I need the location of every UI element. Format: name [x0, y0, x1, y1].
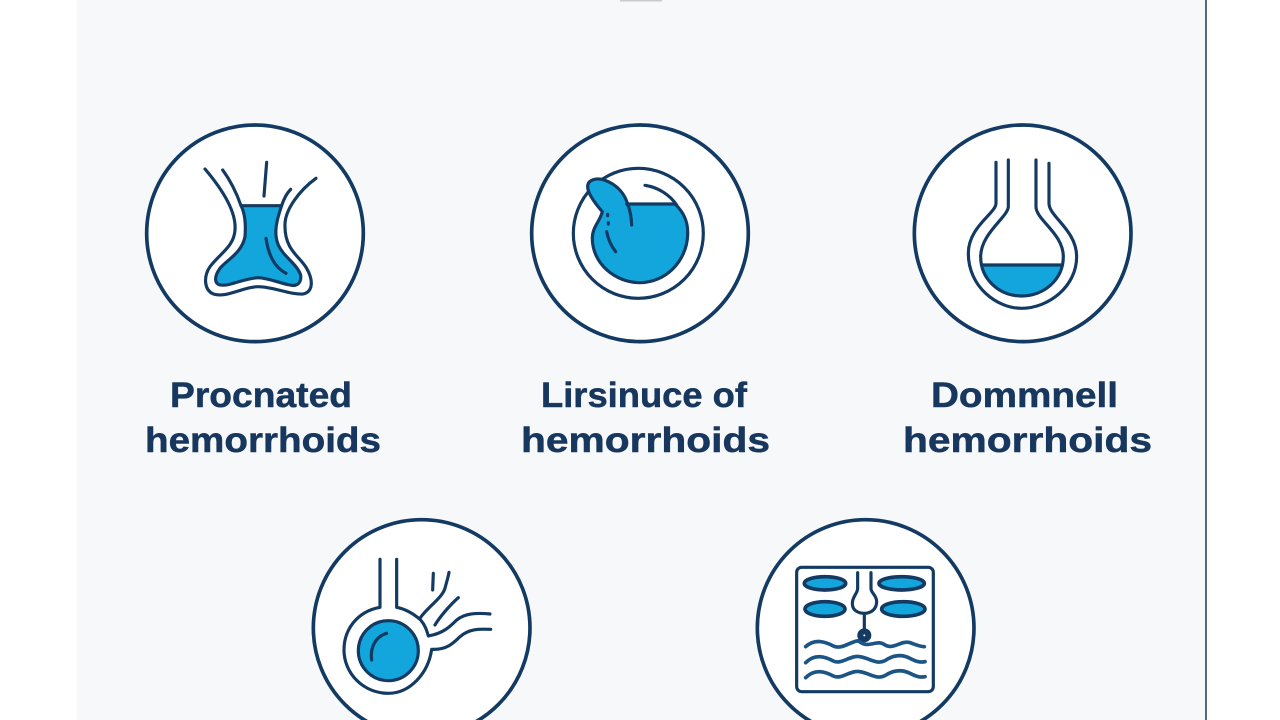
- icon: tissue cross-section: [757, 520, 974, 720]
- label: Dommnell hemorrhoids: hemorrhoids: [903, 421, 1152, 460]
- label: Procnated hemorrhoids: [145, 376, 381, 460]
- icon: round hemorrhoid in ring: [532, 125, 748, 342]
- icon: round hemorrhoid with branching vessels: [313, 520, 530, 720]
- label: Dommnell hemorrhoids: Dommnell: [931, 376, 1118, 415]
- label: Procnated hemorrhoids: hemorrhoids: [145, 421, 381, 460]
- label: Lirsinuce of hemorrhoids: [521, 376, 770, 460]
- label: Procnated hemorrhoids: Procnated: [170, 376, 352, 415]
- icon: flask-shaped hemorrhoid: [914, 125, 1131, 342]
- label: Lirsinuce of hemorrhoids: hemorrhoids: [521, 421, 770, 460]
- panel right border: [1205, 0, 1207, 720]
- label: Dommnell hemorrhoids: [903, 376, 1152, 460]
- icon: prolapsed hemorrhoid: [147, 125, 363, 342]
- label: Lirsinuce of hemorrhoids: Lirsinuce of: [541, 376, 747, 415]
- top tab: [620, 0, 662, 2]
